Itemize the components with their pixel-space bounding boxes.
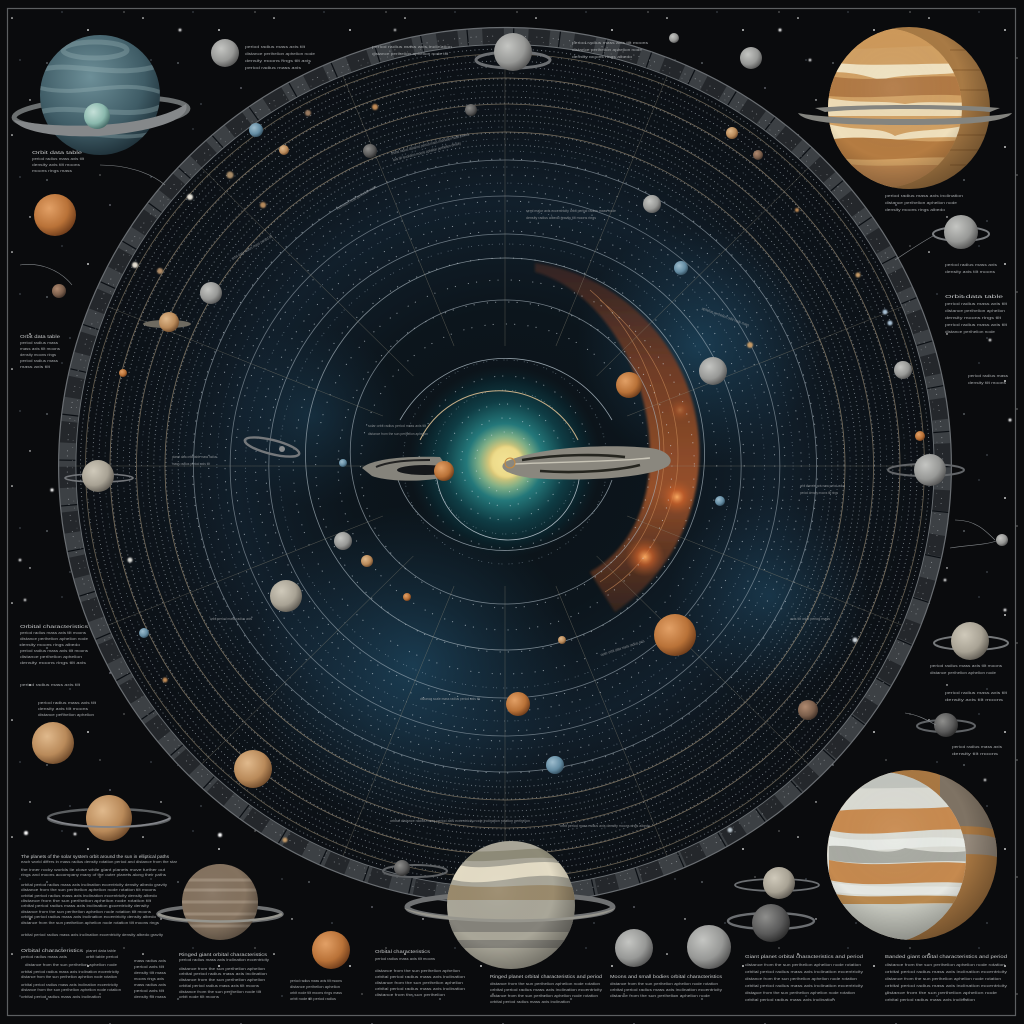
planet: top grey xyxy=(211,39,239,67)
text block: bottom narrow column: moons rings axis xyxy=(134,976,164,981)
bottom right banded giant planet xyxy=(800,765,1000,945)
text block: right lower b xyxy=(945,690,1008,756)
text block: left middle: mass axis tilt moons xyxy=(20,346,60,351)
planet: left brown xyxy=(52,284,66,298)
text block: left lower: density moons rings albedo xyxy=(20,642,80,647)
text block: top centre left: distance perihelion aphelion node xyxy=(245,51,315,56)
text block: bottom 7 xyxy=(610,974,723,998)
text block: left lower: distance perihelion aphelion node xyxy=(20,636,88,641)
text block: bottom 4: period radius mass axis tilt moons xyxy=(290,978,342,983)
text block: top centre xyxy=(372,44,452,56)
planet: orange upper xyxy=(726,127,738,139)
text block: top centre left: density moons rings tilt axis xyxy=(245,58,311,63)
sun core xyxy=(491,446,523,478)
text block: bottom 5: distance from the sun perihelion aphelion xyxy=(375,968,460,973)
text block: bottom narrow column xyxy=(86,948,166,999)
text block: under brown planet: orbital period radius mass axis tilt moons xyxy=(179,983,259,988)
inner dots xyxy=(398,358,612,564)
text block: top right xyxy=(572,40,648,59)
text block: bottom 5: distance from the sun perihelion aphelion xyxy=(375,980,463,985)
text block: right middle: period radius mass xyxy=(968,373,1008,378)
orbit rings xyxy=(73,42,937,890)
text block: right top under giant xyxy=(885,193,963,212)
text block: bottom left lower: Orbital characteristics xyxy=(21,948,84,953)
ringed planet lower left xyxy=(48,795,170,841)
orange nebula arc xyxy=(535,263,699,612)
chart labels: semi major axis eccentricity orbit period radius mass node xyxy=(526,208,616,213)
text block: bottom 5: Orbital characteristics xyxy=(375,949,431,954)
text block: bottom left main: orbital period radius mass axis inclination eccentricity density albedo xyxy=(21,914,156,919)
text block: bottom narrow column: density tilt mass xyxy=(134,970,166,975)
text block: left top: density axis tilt moons xyxy=(32,162,80,167)
text block: left middle: Orbit data table xyxy=(20,334,61,339)
bottom left ringed brown planet xyxy=(158,864,282,940)
text block: top centre left xyxy=(245,44,315,70)
chart labels: axis tilt revolution moons aphelion perihelion density xyxy=(392,140,461,162)
text block: bottom 6: orbital period radius mass axis inclination xyxy=(490,999,570,1004)
text block: top right: density moons rings albedo xyxy=(572,54,632,59)
text block: top centre: distance perihelion aphelion node tilt xyxy=(372,51,449,56)
text block: left lower: period radius mass axis tilt moons xyxy=(20,648,88,653)
planet: brown upper xyxy=(753,150,763,160)
text block: bottom narrow column: density tilt mass xyxy=(134,994,166,999)
text block: bottom left main: The planets of the solar system orbit around the sun in elliptical paths xyxy=(21,854,170,859)
planet: right grey xyxy=(894,361,912,379)
text block: left top: period radius mass axis tilt xyxy=(32,156,85,161)
planet: orange left xyxy=(119,369,127,377)
text block: right top under giant: density moons rings albedo xyxy=(885,207,945,212)
planet: grey blue xyxy=(643,195,661,213)
text block: bottom left main: distance from the sun perihelion aphelion node rotation tilt xyxy=(21,898,152,903)
planet: cream left xyxy=(270,580,302,612)
planet: tan upper left xyxy=(279,145,289,155)
text block: bottom left lower: period radius mass axis xyxy=(21,954,67,959)
text block: right upper: distance perihelion aphelion xyxy=(945,308,1005,313)
text block: bottom left main: orbital period radius mass axis inclination eccentricity density albedo gravity xyxy=(21,882,167,887)
planet: orange near arc xyxy=(616,372,642,398)
text block: bottom 6: distance from the sun perihelion aphelion node rotation xyxy=(490,993,598,998)
text block: bottom 9: distance from the sun perihelion aphelion node rotation xyxy=(885,962,1005,967)
planet: disc lower left tan xyxy=(234,750,272,788)
chart labels: orbital distance radius mass period axis eccentricity node inclination rotation perihelion xyxy=(390,818,530,823)
chart labels: inclination node perihelion mass xyxy=(336,184,377,211)
top right banded giant planet xyxy=(798,20,1012,200)
ringed planet bottom right b xyxy=(728,904,814,942)
planet: bottom grey b xyxy=(687,925,731,969)
text block: top centre left: period radius mass axis tilt xyxy=(245,44,306,49)
text block: left lower small: density axis tilt moons xyxy=(38,706,88,711)
text block: bottom 7: distance from the sun perihelion aphelion node xyxy=(610,993,710,998)
text block: right upper: period radius mass axis xyxy=(945,262,997,267)
top left banded planet with rings xyxy=(13,35,189,155)
chart labels: orbit period mass radius axis density moons rings albedo xyxy=(560,823,650,828)
text block: left top: moons rings mass xyxy=(32,168,72,173)
text block: bottom 5: distance from the sun perihelion xyxy=(375,992,445,997)
chart labels: outer orbit data mass radius axis xyxy=(600,638,645,657)
text block: bottom left lower: distance from the sun perihelion aphelion node rotation xyxy=(21,987,121,992)
planet: bottom orange xyxy=(312,931,350,969)
text block: under brown planet: orbital period radius mass axis inclination xyxy=(179,971,267,976)
text block: bottom left lower xyxy=(21,948,121,999)
text block: right upper: period radius mass axis tilt xyxy=(945,322,1008,327)
text block: right lower b: period radius mass axis xyxy=(952,744,1002,749)
text block: bottom narrow column: mass radius axis xyxy=(134,982,166,987)
text block: left lower small: period radius mass axis tilt xyxy=(38,700,97,705)
chart labels xyxy=(172,131,845,828)
chart labels: aphelion perihelion orbit node mass xyxy=(701,306,750,328)
text block: bottom narrow column: period axis tilt xyxy=(134,988,165,993)
text block: left lower xyxy=(20,624,89,687)
disc backdrop xyxy=(58,27,952,905)
text block: top centre left: period radius mass axis xyxy=(245,65,301,70)
planet: blue left lower xyxy=(139,628,149,638)
central right ring xyxy=(502,446,671,480)
text block: bottom left main: distance from the sun perihelion aphelion node rotation tilt moons xyxy=(21,909,151,914)
text block: bottom 5: orbital period radius mass axis inclination xyxy=(375,986,465,991)
text block: bottom 6: Ringed planet orbital characteristics and period xyxy=(490,974,603,979)
ringed planet top xyxy=(476,33,550,71)
planet: left orange xyxy=(34,194,76,236)
text block: bottom 8: Giant planet orbital characteristics and period xyxy=(745,954,864,959)
text block: bottom left main: distance from the sun perihelion aphelion node rotation tilt moons xyxy=(21,887,156,892)
text block: right lower a: distance perihelion aphelion node xyxy=(930,670,996,675)
text block: right upper: density axis tilt moons xyxy=(945,269,995,274)
text block: under brown planet xyxy=(179,952,269,999)
planet: orange right xyxy=(915,431,925,441)
text block: bottom narrow column: period axis tilt xyxy=(134,964,165,969)
ringed planet right lower xyxy=(934,622,1008,660)
text block: bottom left lower: orbital period radius mass axis inclination eccentricity xyxy=(21,969,119,974)
rim objects xyxy=(128,104,892,842)
text block: left middle: density moons rings xyxy=(20,352,56,357)
text block: bottom 6: orbital period radius mass axis inclination eccentricity xyxy=(490,987,602,992)
text block: bottom left lower: orbital period radius mass axis inclination eccentricity xyxy=(21,982,118,987)
text block: right lower a: period radius mass axis tilt moons xyxy=(930,663,1002,668)
text block: bottom 5 xyxy=(375,949,465,997)
text block: bottom 8 xyxy=(745,954,864,1002)
ringed planet left xyxy=(65,460,133,492)
planet: far right tiny xyxy=(996,534,1008,546)
text block: left top: Orbit data table xyxy=(32,150,83,155)
text block: bottom 8: distance from the sun perihelion aphelion node rotation xyxy=(745,976,857,981)
text block: bottom narrow column: orbit table period xyxy=(86,954,118,959)
text block: left lower: period radius mass axis tilt moons xyxy=(20,630,86,635)
text block: left middle: period radius mass xyxy=(20,340,58,345)
text block: left lower: density moons rings tilt axis xyxy=(20,660,86,665)
text block: bottom 9: orbital period radius mass axis inclination xyxy=(885,997,975,1002)
planet: orange lower xyxy=(506,692,530,716)
text block: bottom left lower: distance from the sun perihelion aphelion node xyxy=(25,962,117,967)
chart labels: density radius albedo gravity tilt moons rings xyxy=(526,215,596,220)
text block: bottom left main: each world differs in mass radius density rotation period and distance from the star xyxy=(21,859,178,864)
chart labels: mass radius period axis tilt xyxy=(172,461,211,466)
planet: small blue centre xyxy=(715,496,725,506)
ringed planet bottom small xyxy=(383,860,447,877)
ringed planet bottom right a xyxy=(735,867,819,899)
chart labels: axis tilt orbit period mass xyxy=(790,616,830,621)
text block: left lower: distance perihelion aphelion xyxy=(20,654,82,659)
planet: tiny lower xyxy=(558,636,566,644)
radial grid xyxy=(73,42,937,890)
text block: left lower: period radius mass axis tilt xyxy=(20,682,81,687)
planet: grey left xyxy=(200,282,222,304)
chart labels: orbit diameter axis mass period radius xyxy=(800,483,845,488)
planet: lower left tan xyxy=(32,722,74,764)
chart labels: orbital radius distance period mass inclination node period xyxy=(390,131,469,156)
text block: right top under giant: distance perihelion aphelion node xyxy=(885,200,957,205)
text block: left middle: mass axis tilt xyxy=(20,364,51,369)
dark ringed planet right xyxy=(917,713,975,737)
rim scale band xyxy=(59,28,951,904)
text block: bottom 9: distance from the sun perihelion aphelion node xyxy=(885,990,997,995)
text block: bottom 6 xyxy=(490,974,603,1004)
planet: large orange lower xyxy=(654,614,696,656)
text block: bottom left main: orbital period radius mass axis inclination eccentricity density albedo xyxy=(21,893,157,898)
planet: blue upper left xyxy=(249,123,263,137)
text block: bottom 7: distance from the sun perihelion aphelion node rotation xyxy=(610,981,718,986)
text block: right upper: Orbit data table xyxy=(945,294,1004,299)
planet: top tiny xyxy=(669,33,679,43)
text block: bottom left lower: orbital period radius mass axis inclination xyxy=(21,994,101,999)
text block: bottom 8: orbital period radius mass axis inclination eccentricity xyxy=(745,969,863,974)
text block: right lower b: period radius mass axis tilt xyxy=(945,690,1008,695)
orbital chart disc xyxy=(58,27,952,905)
text block: left middle xyxy=(20,334,61,369)
text block: left lower: Orbital characteristics xyxy=(20,624,89,629)
text block: bottom 9 xyxy=(885,954,1008,1002)
text block: top right: distance perihelion aphelion node xyxy=(572,47,642,52)
text block: under brown planet: distance from the sun perihelion aphelion xyxy=(179,966,265,971)
planet: tiny orange xyxy=(403,593,411,601)
text block: bottom left main: rings and moons accompany many of the outer planets along their paths xyxy=(21,872,166,877)
text block: bottom 9: orbital period radius mass axis inclination eccentricity xyxy=(885,969,1007,974)
small ringed satellite left xyxy=(143,312,191,332)
planet: blue xyxy=(674,261,688,275)
text block: bottom 5: period radius mass axis tilt moons xyxy=(375,956,435,961)
text block: under brown planet: distance from the sun perihelion node tilt xyxy=(179,989,262,994)
text block: bottom 4 xyxy=(290,978,342,1001)
text block: right lower b: density tilt moons xyxy=(952,751,998,756)
chart labels: distance scale mass radius period axis tilt xyxy=(420,696,481,701)
central glow xyxy=(409,366,601,558)
text block: bottom 9: Banded giant orbital characteristics and period xyxy=(885,954,1008,959)
chart labels: solar orbit radius period mass axis tilt xyxy=(368,423,427,428)
chart labels: distance from the sun perihelion aphelion xyxy=(368,431,428,436)
text block: right upper: period radius mass axis tilt xyxy=(945,301,1008,306)
text block: bottom left main: distance from the sun perihelion aphelion node rotation tilt moons rings xyxy=(21,920,159,925)
text block: bottom left main: the inner rocky worlds lie close while giant planets move further out xyxy=(21,867,166,872)
planet: blue lower xyxy=(546,756,564,774)
text block: under brown planet: distance from the sun perihelion aphelion xyxy=(179,977,265,982)
planet: dark upper xyxy=(465,104,477,116)
text block: under brown planet: Ringed giant orbital characteristics xyxy=(179,952,268,957)
text block: bottom left main: orbital period radius mass axis inclination eccentricity density xyxy=(21,903,149,908)
text block: left top xyxy=(32,150,85,173)
planet: small blue left xyxy=(339,459,347,467)
text block: right middle: density tilt moons xyxy=(968,380,1006,385)
text block: bottom 4: orbit node tilt period radius xyxy=(290,996,336,1001)
planet: brown right xyxy=(798,700,818,720)
text block: right top under giant: period radius mass axis inclination xyxy=(885,193,963,198)
text block: bottom 9: distance from the sun perihelion aphelion node rotation xyxy=(885,976,1001,981)
text block: left lower small xyxy=(38,700,97,717)
chart labels: orbit data radius mass period tilt xyxy=(231,233,274,261)
planet: bottom grey a xyxy=(615,929,653,967)
text block: bottom 6: distance from the sun perihelion aphelion node rotation xyxy=(490,981,600,986)
chart labels: orbit period mass radius axis xyxy=(210,616,252,621)
small ring left xyxy=(243,433,301,461)
text block: bottom left main: orbital period radius mass axis inclination eccentricity density albedo gravity xyxy=(21,932,163,937)
text block: bottom 7: orbital period radius mass axis inclination eccentricity xyxy=(610,987,722,992)
text block: bottom narrow column: planet data table xyxy=(86,948,116,953)
text block: right lower a xyxy=(930,663,1002,675)
ringed planet right upper xyxy=(933,215,989,249)
planet: grey upper xyxy=(363,144,377,158)
text block: right upper: distance perihelion node xyxy=(945,329,995,334)
text block: bottom 8: orbital period radius mass axis inclination xyxy=(745,997,835,1002)
chart labels: period density moons tilt rings xyxy=(800,490,838,495)
text block: left middle: period radius mass xyxy=(20,358,58,363)
text block: under brown planet: period radius mass axis inclination eccentricity xyxy=(179,957,269,962)
text block: bottom 5: orbital period radius mass axis inclination xyxy=(375,974,465,979)
planet: tan lower inner xyxy=(361,555,373,567)
planet: grey lower inner xyxy=(334,532,352,550)
text block: bottom 4: distance perihelion aphelion xyxy=(290,984,340,989)
text block: under brown planet: orbit node tilt moons xyxy=(179,994,219,999)
text block: bottom 7: Moons and small bodies orbital characteristics xyxy=(610,974,723,979)
planet: top right grey xyxy=(740,47,762,69)
ringed planet right mid xyxy=(888,454,964,486)
text block: bottom 9: orbital period radius mass axis inclination eccentricity xyxy=(885,983,1007,988)
central left ring with planet xyxy=(362,457,454,481)
text block: bottom 4: orbit node tilt moons rings mass xyxy=(290,990,342,995)
text block: right upper xyxy=(945,262,1008,334)
text block: top centre: period radius mass axis inclination xyxy=(372,44,452,49)
text block: top right: period radius mass axis tilt moons xyxy=(572,40,648,45)
bottom centre ringed planet xyxy=(404,841,615,969)
text block: bottom left lower: distance from the sun perihelion aphelion node rotation xyxy=(21,974,117,979)
text block: bottom narrow column: mass radius axis xyxy=(134,958,166,963)
text block: bottom left main xyxy=(21,854,178,937)
leader lines xyxy=(20,165,996,725)
text block: bottom 8: distance from the sun perihelion aphelion node rotation xyxy=(745,990,855,995)
text block: left lower small: distance perihelion aphelion xyxy=(38,712,94,717)
text block: bottom 8: distance from the sun perihelion aphelion node rotation xyxy=(745,962,861,967)
bright stars xyxy=(19,28,1011,837)
text block: right lower b: density axis tilt moons xyxy=(945,697,1003,702)
text block: bottom 8: orbital period radius mass axis inclination eccentricity xyxy=(745,983,863,988)
text block: right upper: density moons rings tilt xyxy=(945,315,1002,320)
chart labels: planet data orbit table mass radius xyxy=(172,454,217,459)
planet: grey near arc xyxy=(699,357,727,385)
text block: right middle xyxy=(968,373,1008,385)
